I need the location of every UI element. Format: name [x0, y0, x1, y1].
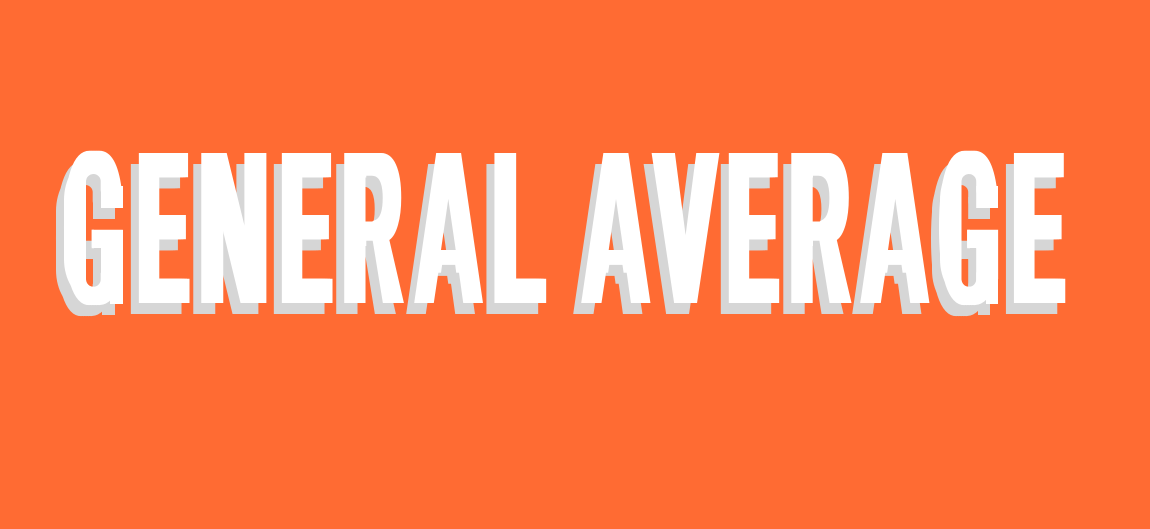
- title shadow: GENERAL AVERAGE: R: [778, 118, 835, 361]
- title: GENERAL AVERAGE: V: [651, 107, 710, 350]
- title: GENERAL AVERAGE: G: [61, 107, 117, 350]
- title: GENERAL AVERAGE: R: [339, 107, 395, 350]
- title: GENERAL AVERAGE: L: [489, 107, 538, 350]
- background panel: [56, 150, 1066, 316]
- title: GENERAL AVERAGE: R: [786, 107, 843, 350]
- title: GENERAL AVERAGE: A: [412, 107, 475, 350]
- title shadow: GENERAL AVERAGE: E: [716, 118, 764, 361]
- title: GENERAL AVERAGE: E: [724, 107, 772, 350]
- title shadow: GENERAL AVERAGE: E: [1001, 118, 1050, 361]
- title: GENERAL AVERAGE: E: [134, 107, 182, 350]
- title shadow: GENERAL AVERAGE: A: [404, 118, 467, 361]
- title shadow: GENERAL AVERAGE: R: [331, 118, 387, 361]
- title: GENERAL AVERAGE: A: [858, 107, 922, 350]
- title: GENERAL AVERAGE: E: [277, 107, 325, 350]
- title: GENERAL AVERAGE: G: [936, 107, 993, 350]
- title shadow: GENERAL AVERAGE: A: [850, 118, 914, 361]
- title shadow: GENERAL AVERAGE: E: [269, 118, 317, 361]
- title shadow: GENERAL AVERAGE: L: [481, 118, 530, 361]
- title shadow: GENERAL AVERAGE: N: [187, 118, 254, 361]
- title shadow: GENERAL AVERAGE: G: [53, 118, 109, 361]
- title: GENERAL AVERAGE: A: [579, 107, 643, 350]
- title shadow: GENERAL AVERAGE: G: [928, 118, 985, 361]
- title: GENERAL AVERAGE: E: [1009, 107, 1058, 350]
- title shadow: GENERAL AVERAGE: V: [643, 118, 702, 361]
- title: GENERAL AVERAGE: [64, 107, 1066, 350]
- title shadow: GENERAL AVERAGE: E: [126, 118, 174, 361]
- title shadow: GENERAL AVERAGE: [56, 118, 1058, 361]
- title shadow: GENERAL AVERAGE: A: [571, 118, 635, 361]
- title: GENERAL AVERAGE: N: [195, 107, 262, 350]
